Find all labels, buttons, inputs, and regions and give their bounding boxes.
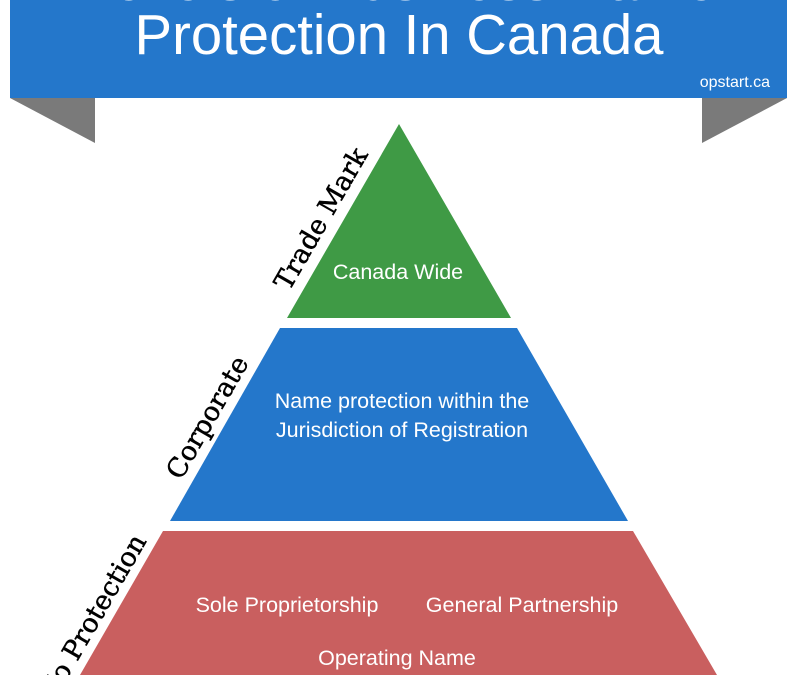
tier: no protection trapezoid — [80, 531, 717, 675]
tier: trade mark triangle: Canada Wide — [333, 260, 463, 284]
label: Corporate: Corporate — [160, 351, 255, 484]
tier: corporate trapezoid — [170, 328, 628, 521]
tier: corporate trapezoid: Jurisdiction of Registration — [276, 418, 528, 442]
tier: corporate trapezoid: Name protection within the — [275, 389, 529, 413]
tier: no protection trapezoid: Operating Name — [318, 646, 476, 670]
title banner: Protection In Canada — [135, 3, 664, 66]
label: Trade Mark: Trade Mark — [268, 142, 375, 296]
tier: no protection trapezoid: General Partnership — [426, 593, 618, 617]
title banner: opstart.ca — [700, 74, 770, 91]
left ribbon fold — [10, 98, 95, 143]
tier: no protection trapezoid: Sole Proprietorship — [196, 593, 378, 617]
title banner — [10, 0, 787, 98]
right ribbon fold — [702, 98, 787, 143]
tier: trade mark triangle — [287, 124, 511, 318]
